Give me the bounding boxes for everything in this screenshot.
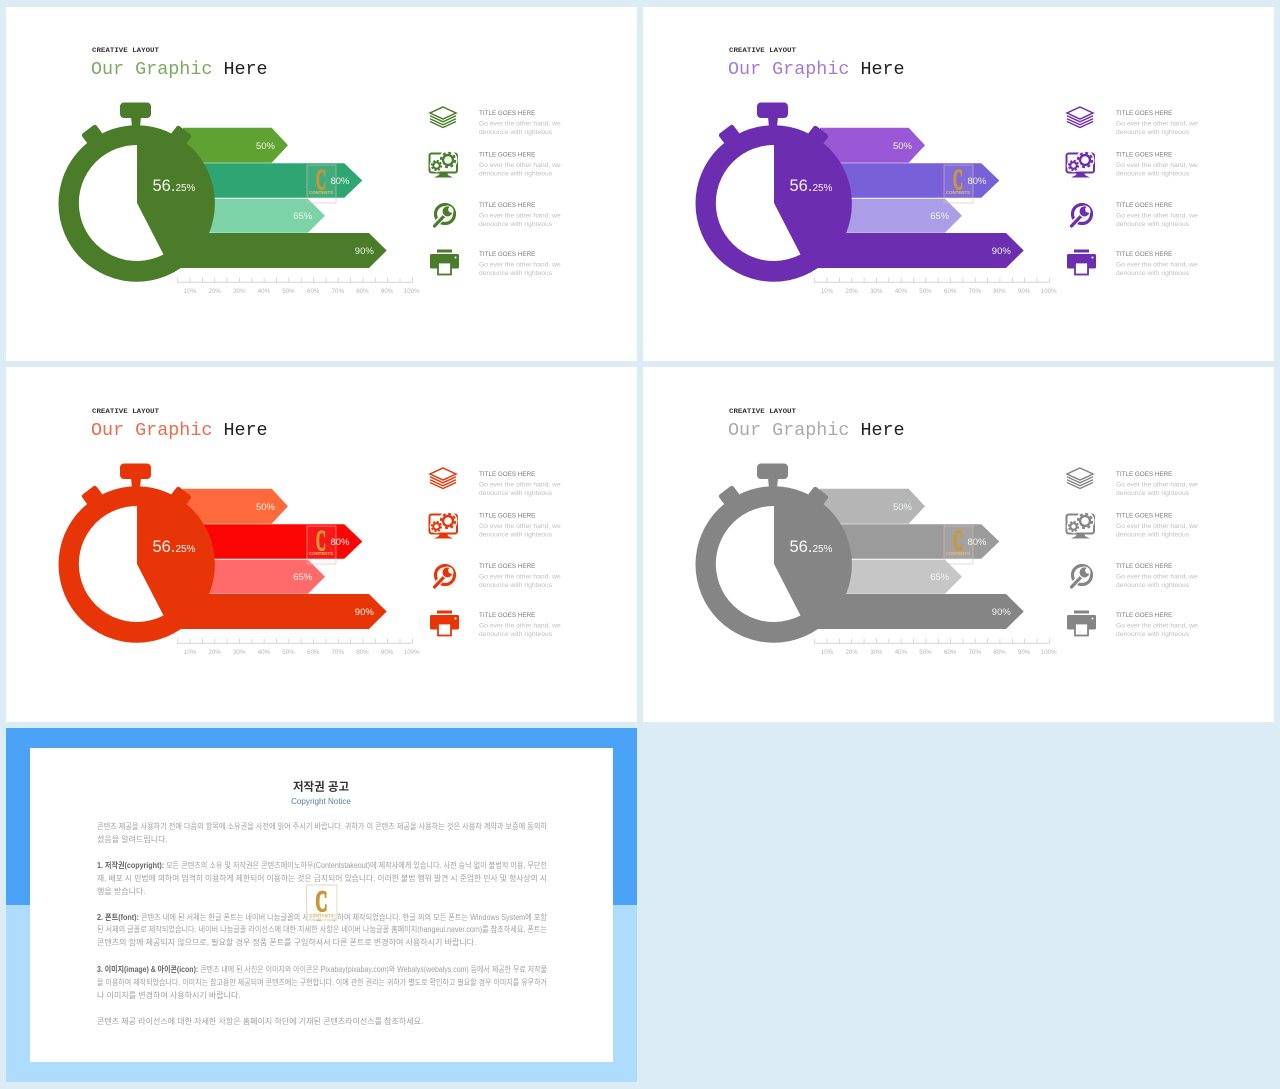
legend item 3	[1071, 563, 1198, 589]
axis: 70%	[969, 288, 981, 295]
section 2: font	[97, 912, 548, 947]
legend item 1: Go ever the other hand, we	[1116, 120, 1198, 128]
legend item 4	[430, 610, 561, 638]
bar labels: 90%	[992, 246, 1011, 257]
section 3: image and icon	[97, 964, 547, 1000]
bar labels: 65%	[293, 572, 313, 583]
bar labels: 80%	[330, 537, 350, 548]
legend item 3: denounce with righteous	[1116, 582, 1190, 589]
watermark: CONTENTS	[309, 551, 333, 556]
axis: 30%	[233, 649, 246, 656]
section 2: font: 2. 폰트(font): 콘텐츠 내에 된 서체는 한글 폰트는 네이버 나눔글꼴의 서체를 사용하여 제작되었습니다. 한글 외의 모든 폰트는 Windows System에 포함	[97, 912, 548, 922]
bar labels: 80%	[967, 176, 987, 187]
legend item 1	[430, 468, 561, 497]
watermark: C	[316, 526, 326, 557]
axis: 20%	[845, 288, 858, 295]
axis: 80%	[356, 649, 369, 656]
bar labels: 50%	[893, 141, 913, 152]
axis: 90%	[381, 649, 394, 656]
watermark: CONTENTS	[946, 551, 970, 556]
legend item 2: Go ever the other hand, we	[1116, 162, 1198, 169]
bar labels: 65%	[293, 211, 313, 222]
bar 80%	[195, 524, 362, 559]
axis: 30%	[870, 649, 883, 656]
axis: 40%	[895, 649, 908, 656]
axis	[177, 641, 420, 656]
bar 50%	[820, 128, 925, 163]
legend item 1: denounce with righteous	[479, 129, 553, 136]
bar labels: 50%	[256, 141, 276, 152]
legend item 3: Go ever the other hand, we	[1116, 574, 1198, 580]
bar labels: 80%	[967, 537, 987, 548]
axis	[814, 641, 1057, 656]
axis: 100%	[404, 649, 420, 656]
axis: 90%	[1018, 649, 1031, 656]
axis: 60%	[307, 288, 320, 295]
axis: 20%	[845, 649, 858, 656]
axis: 100%	[404, 288, 420, 295]
legend item 1: Go ever the other hand, we	[479, 120, 561, 128]
legend item 4	[430, 250, 561, 277]
axis: 70%	[332, 288, 344, 295]
axis: 30%	[233, 288, 246, 295]
legend item 4: Go ever the other hand, we	[1116, 622, 1198, 630]
axis: 90%	[381, 288, 394, 295]
legend item 1: TITLE GOES HERE	[1116, 471, 1172, 478]
section 3: image and icon: 을 이용하여 제작되었습니다. 이미지는 참고용만 제공되며 콘텐츠에는 구현합니다. 이에 관한 권리는 귀하가 별도로 확인하고 필요할 경우 이미지를 유무하거	[97, 977, 547, 987]
legend item 3: TITLE GOES HERE	[1116, 202, 1172, 209]
panel: purple slide	[643, 7, 1274, 361]
axis: 50%	[282, 649, 295, 656]
legend item 4	[1067, 250, 1198, 277]
title: Our Graphic Here	[728, 420, 905, 441]
legend item 4: denounce with righteous	[479, 631, 553, 638]
watermark	[944, 165, 973, 203]
intro paragraph: 셨음을 알려드립니다.	[97, 834, 168, 844]
axis: 40%	[258, 288, 271, 295]
legend item 3: TITLE GOES HERE	[479, 563, 535, 570]
axis: 40%	[258, 649, 271, 656]
bar 90%	[815, 233, 1024, 268]
bar labels: 90%	[355, 607, 374, 618]
legend item 2: denounce with righteous	[479, 170, 553, 178]
watermark	[944, 526, 973, 564]
axis: 100%	[1041, 288, 1057, 295]
bar 90%	[815, 594, 1024, 629]
axis: 50%	[282, 288, 295, 295]
stopwatch value: 56.25%	[790, 177, 833, 195]
legend item 4: TITLE GOES HERE	[479, 612, 535, 619]
legend item 3: denounce with righteous	[1116, 221, 1190, 228]
axis: 60%	[944, 649, 957, 656]
legend item 2: TITLE GOES HERE	[1116, 512, 1172, 520]
bar 90%	[178, 594, 387, 629]
stopwatch	[58, 464, 215, 643]
legend item 2: denounce with righteous	[1116, 532, 1190, 538]
bar labels	[893, 141, 1011, 257]
stopwatch value: 56.25%	[790, 538, 833, 556]
watermark	[307, 165, 336, 203]
axis: 10%	[821, 649, 834, 656]
section 1: copyright: 재, 배포 시 민법에 의하여 엄격히 이용하게 제한되어 이용하는 것은 금지되어 있습니다. 이러한 불법 행위 발견 시 준엄한 민사 및 형사상의 시	[97, 873, 547, 883]
copyright heading: 저작권 공고	[293, 780, 349, 794]
bar 90%	[178, 233, 387, 268]
bar 65%	[827, 199, 962, 233]
panel: red slide	[6, 367, 637, 722]
axis: 50%	[919, 649, 932, 656]
bar labels	[256, 141, 374, 257]
stopwatch	[696, 464, 852, 643]
bar labels: 90%	[355, 246, 374, 257]
watermark: CONTENTS	[309, 913, 334, 918]
axis: 20%	[208, 649, 221, 656]
axis: 40%	[895, 288, 908, 295]
legend item 2	[1066, 512, 1198, 538]
legend item 4: Go ever the other hand, we	[479, 262, 561, 268]
legend item 1	[1067, 468, 1198, 497]
bar labels: 65%	[930, 572, 950, 583]
legend item 1	[1067, 107, 1198, 136]
axis: 30%	[870, 288, 883, 295]
legend item 3: denounce with righteous	[479, 582, 553, 589]
axis	[177, 280, 420, 295]
bar 65%	[827, 560, 962, 594]
legend item 3: Go ever the other hand, we	[1116, 212, 1198, 220]
watermark: CONTENTS	[946, 190, 970, 195]
axis: 10%	[184, 288, 197, 295]
section 2: font: 된 서체의 글꼴로 제작되었습니다. 네이버 나눔글꼴 라이선스에 대한 자세한 사항은 네이버 나눔글꼴 홈페이지(hangeul.naver.com)를 참조하세요. 폰트는	[97, 924, 547, 934]
legend item 2: Go ever the other hand, we	[1116, 523, 1198, 530]
legend item 1	[430, 107, 561, 136]
legend item 2	[430, 150, 561, 178]
axis: 10%	[821, 288, 834, 295]
legend item 4: Go ever the other hand, we	[1116, 262, 1198, 268]
legend item 4: Go ever the other hand, we	[479, 622, 561, 630]
panel: grey slide	[643, 367, 1274, 722]
legend item 4: TITLE GOES HERE	[1116, 251, 1172, 258]
closing line: 콘텐츠 제공 라이선스에 대한 자세한 사항은 홈페이지 하단에 기재된 콘텐츠라이선스를 참조하세요.	[97, 1016, 423, 1026]
legend item 2: TITLE GOES HERE	[479, 512, 535, 520]
watermark	[307, 526, 336, 564]
intro paragraph: 콘텐츠 제공을 사용하기 전에 다음의 항목에 소유권을 사전에 읽어 주시기 바랍니다. 귀하가 이 콘텐츠 제공을 사용하는 것은 사용자 계약과 보증에 동의하	[97, 821, 548, 831]
legend item 2	[430, 512, 561, 538]
bar 65%	[190, 199, 325, 233]
bar labels: 50%	[893, 502, 913, 513]
legend item 2: Go ever the other hand, we	[479, 162, 561, 169]
axis: 60%	[307, 649, 320, 656]
watermark: C	[953, 526, 963, 557]
bar labels: 50%	[256, 502, 276, 513]
legend item 1: denounce with righteous	[1116, 129, 1190, 136]
legend item 2	[1066, 150, 1198, 178]
stopwatch value: 56.25%	[152, 538, 196, 556]
legend item 4	[1067, 610, 1198, 638]
axis: 70%	[332, 649, 344, 656]
legend item 1: Go ever the other hand, we	[1116, 482, 1198, 488]
bar labels	[893, 502, 1011, 618]
copyright subheading: Copyright Notice	[291, 797, 351, 806]
legend item 1: TITLE GOES HERE	[479, 471, 535, 478]
legend item 3: TITLE GOES HERE	[1116, 563, 1172, 570]
legend item 3: TITLE GOES HERE	[479, 202, 535, 209]
legend item 1: denounce with righteous	[479, 490, 553, 497]
axis: 10%	[184, 649, 197, 656]
section 1: copyright	[97, 860, 547, 896]
legend item 4: denounce with righteous	[479, 270, 553, 277]
kicker: CREATIVE LAYOUT	[92, 47, 159, 54]
legend item 3: Go ever the other hand, we	[479, 212, 561, 220]
watermark: CONTENTS	[309, 190, 333, 195]
legend item 3	[434, 202, 561, 228]
stopwatch	[58, 102, 215, 282]
axis: 50%	[919, 288, 932, 295]
kicker: CREATIVE LAYOUT	[729, 408, 796, 415]
watermark: C	[316, 165, 326, 196]
legend item 4: TITLE GOES HERE	[479, 251, 535, 258]
bar labels: 90%	[992, 607, 1011, 618]
axis: 70%	[969, 649, 981, 656]
axis: 100%	[1041, 649, 1057, 656]
stopwatch	[696, 102, 852, 282]
section 3: image and icon: 3. 이미지(image) & 아이콘(icon): 콘텐츠 내에 된 사진은 이미지와 아이콘은 Pixabay(pixabay.com)와 Webalys(webalys.com) 등에서 제공한 무료 저작물	[97, 964, 547, 974]
section 3: image and icon: 나 이미지를 변경하여 사용하시기 바랍니다.	[97, 990, 241, 1000]
section 1: copyright: 행을 받습니다.	[97, 886, 146, 896]
bar 50%	[183, 128, 288, 163]
legend item 1: denounce with righteous	[1116, 490, 1190, 497]
panel: green slide	[6, 7, 637, 361]
section 2: font: 콘텐츠의 함께 제공되지 않으므로, 필요할 경우 정품 폰트를 구입하셔서 다른 폰트로 변경하여 사용하시기 바랍니다.	[97, 937, 476, 947]
bar 80%	[832, 524, 999, 559]
legend item 2: denounce with righteous	[1116, 170, 1190, 178]
legend item 1: TITLE GOES HERE	[479, 110, 535, 117]
bar labels: 80%	[330, 176, 350, 187]
watermark	[306, 885, 337, 920]
title: Our Graphic Here	[728, 59, 905, 80]
legend item 1: Go ever the other hand, we	[479, 482, 561, 488]
legend item 3: denounce with righteous	[479, 221, 553, 228]
bar labels: 65%	[930, 211, 950, 222]
legend item 2: denounce with righteous	[479, 532, 553, 538]
bar 80%	[195, 163, 362, 198]
title: Our Graphic Here	[91, 420, 268, 441]
legend item 2: TITLE GOES HERE	[1116, 152, 1172, 158]
bar 65%	[190, 560, 325, 594]
legend item 3: Go ever the other hand, we	[479, 574, 561, 580]
bar 80%	[832, 163, 999, 198]
bar 50%	[183, 489, 288, 524]
legend item 3	[1071, 202, 1198, 228]
kicker: CREATIVE LAYOUT	[92, 408, 159, 415]
intro paragraph	[97, 821, 548, 844]
axis: 80%	[993, 649, 1006, 656]
legend item 4: denounce with righteous	[1116, 631, 1190, 638]
axis: 20%	[208, 288, 221, 295]
legend item 4: TITLE GOES HERE	[1116, 612, 1172, 619]
legend item 3	[434, 563, 561, 589]
watermark: C	[316, 885, 328, 918]
axis: 80%	[356, 288, 369, 295]
bar 50%	[820, 489, 925, 524]
legend item 1: TITLE GOES HERE	[1116, 110, 1172, 117]
watermark: C	[953, 165, 963, 196]
section 1: copyright: 1. 저작권(copyright): 모든 콘텐츠의 소유 및 저작권은 콘텐츠메이노하우(Contentstakeout)에 제작사에게 있습니다. 사전 승낙 없이 불법적 이용, 무단전	[97, 860, 547, 870]
title: Our Graphic Here	[91, 59, 268, 80]
stopwatch value: 56.25%	[152, 177, 196, 195]
legend item 4: denounce with righteous	[1116, 270, 1190, 277]
axis: 60%	[944, 288, 957, 295]
panel: copyright notice	[6, 728, 637, 1082]
legend item 2: TITLE GOES HERE	[479, 152, 535, 158]
axis: 80%	[993, 288, 1006, 295]
axis	[814, 280, 1057, 295]
axis: 90%	[1018, 288, 1031, 295]
kicker: CREATIVE LAYOUT	[729, 47, 796, 54]
legend item 2: Go ever the other hand, we	[479, 523, 561, 530]
bar labels	[256, 502, 374, 618]
